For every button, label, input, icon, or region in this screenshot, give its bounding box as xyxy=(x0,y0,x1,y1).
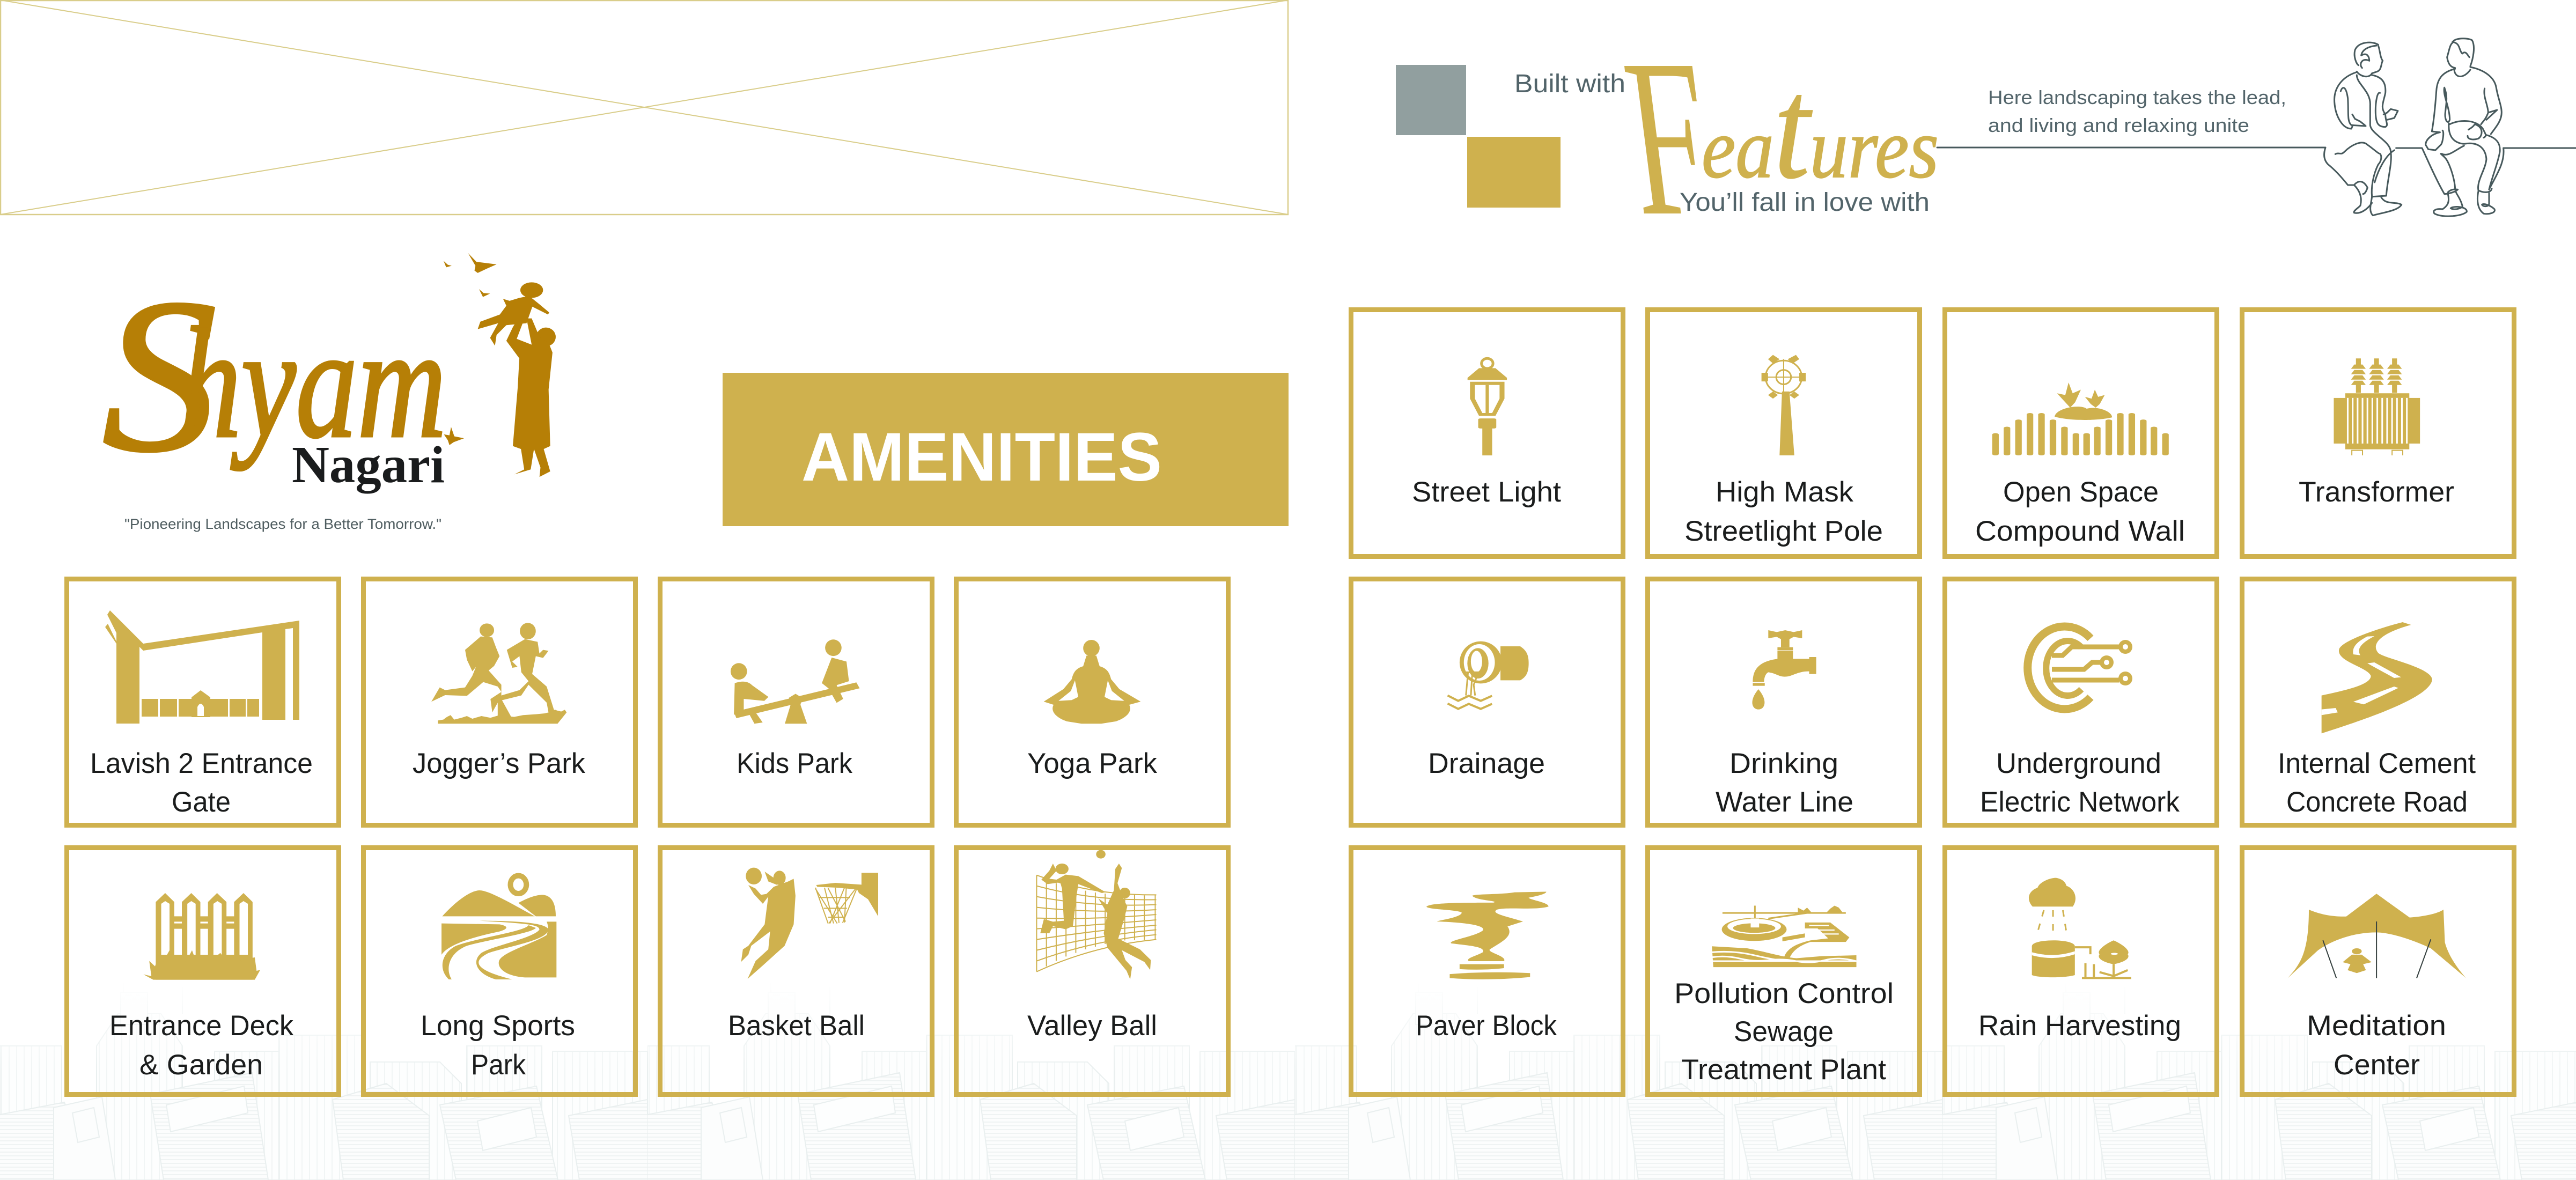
icon: rounded wall with plants xyxy=(1992,382,2169,455)
script heading: Features xyxy=(1596,13,1939,263)
label: High Mask xyxy=(1716,476,1854,508)
label: Street Light xyxy=(1412,476,1561,508)
label: Electric Network xyxy=(1980,786,2180,818)
card: Kids Park xyxy=(660,579,932,825)
label: Lavish 2 Entrance xyxy=(90,748,313,779)
label: Transformer xyxy=(2299,476,2454,508)
logo script wordmark xyxy=(102,254,446,497)
label xyxy=(1684,476,1883,547)
card: Valley Ball xyxy=(956,847,1228,1094)
intro text xyxy=(1988,86,2286,136)
label: Pollution Control xyxy=(1674,978,1894,1009)
card: Entrance Deck & Garden xyxy=(67,847,339,1094)
card: Long Sports Park xyxy=(364,847,635,1094)
card: Transformer xyxy=(2242,310,2514,557)
subheading: You'll fall in love with: You’ll fall in love with xyxy=(1680,188,1930,217)
card: Pollution Control Sewage Treatment Plant xyxy=(1648,847,1919,1094)
label: Rain Harvesting xyxy=(1978,1010,2181,1042)
label: Entrance Deck xyxy=(109,1010,293,1042)
label: Valley Ball xyxy=(1027,1010,1157,1042)
label: Paver Block xyxy=(1416,1010,1557,1042)
label: Yoga Park xyxy=(1027,748,1157,779)
icon: circuit network xyxy=(2028,626,2132,709)
card: Lavish 2 Entrance Gate xyxy=(67,579,339,825)
heading: Built with: Built with xyxy=(1514,70,1625,98)
label: Drinking xyxy=(1729,748,1838,779)
label xyxy=(1975,476,2185,547)
intro text: Here landscaping takes the lead, xyxy=(1988,86,2286,108)
label: Gate xyxy=(172,786,231,818)
icon: basketball player and hoop xyxy=(741,868,878,979)
logo script wordmark: S xyxy=(102,254,217,497)
icon: winding road xyxy=(2322,622,2432,733)
script heading: Features: eatures xyxy=(1702,48,1939,209)
label: Open Space xyxy=(2003,476,2159,508)
card: Yoga Park xyxy=(956,579,1228,825)
gold square xyxy=(1467,137,1561,208)
label xyxy=(90,748,313,818)
icon: meditating yoga figure xyxy=(1044,640,1140,724)
label: Internal Cement xyxy=(2278,748,2476,779)
card: High Mask Streetlight Pole xyxy=(1648,310,1919,557)
icon: children on seesaw xyxy=(731,639,859,724)
label xyxy=(1980,748,2180,818)
icon: sewage treatment plant xyxy=(1712,905,1857,967)
label: Long Sports xyxy=(421,1010,575,1042)
banner heading: AMENITIES xyxy=(801,419,1162,496)
label xyxy=(421,1010,575,1081)
label: Center xyxy=(2334,1049,2420,1081)
card: Basket Ball xyxy=(660,847,932,1094)
label: Kids Park xyxy=(737,748,852,779)
label: & Garden xyxy=(139,1049,263,1081)
card: Internal Cement Concrete Road xyxy=(2242,579,2514,825)
card: Rain Harvesting xyxy=(1945,847,2217,1094)
icon: tent with meditating figure xyxy=(2288,894,2466,978)
label: Water Line xyxy=(1716,786,1853,818)
icon: two joggers on grass xyxy=(431,623,566,724)
logo word Nagari: Nagari xyxy=(292,436,445,493)
panel: Features header xyxy=(1396,13,2576,263)
label xyxy=(2278,748,2476,818)
card: Drinking Water Line xyxy=(1648,579,1919,825)
card: Open Space Compound Wall xyxy=(1945,310,2217,557)
label: Sewage xyxy=(1734,1016,1834,1048)
label: Underground xyxy=(1996,748,2161,779)
label: Compound Wall xyxy=(1975,515,2185,547)
icon: high mast light xyxy=(1762,355,1806,455)
label xyxy=(2307,1010,2446,1081)
city skyline background xyxy=(0,982,2576,1180)
icon: picket fence with grass xyxy=(143,893,260,980)
card: Drainage xyxy=(1351,579,1623,825)
label: Jogger’s Park xyxy=(413,748,585,779)
icon: electrical transformer xyxy=(2334,358,2420,455)
label: Treatment Plant xyxy=(1681,1054,1886,1086)
icon: water tap with drop xyxy=(1752,630,1816,710)
banner: AMENITIES xyxy=(723,373,1289,526)
icon: drainage pipe xyxy=(1448,641,1529,709)
card: Street Light xyxy=(1351,310,1623,557)
grey square xyxy=(1396,65,1466,135)
card: Paver Block xyxy=(1351,847,1623,1094)
label: Park xyxy=(471,1049,526,1081)
label xyxy=(109,1010,293,1081)
tagline: "Pioneering Landscapes for a Better Tomorrow." xyxy=(124,516,441,532)
logo script wordmark: hyam xyxy=(180,295,446,471)
logo: Shyam Nagari xyxy=(102,253,556,532)
image placeholder with crossed lines xyxy=(0,0,1289,215)
label: Basket Ball xyxy=(728,1010,865,1042)
icon: street lamp xyxy=(1468,358,1507,455)
label: Meditation xyxy=(2307,1010,2446,1042)
label: Concrete Road xyxy=(2286,786,2468,818)
label xyxy=(1716,748,1853,818)
card: Meditation Center xyxy=(2242,847,2514,1094)
card: Jogger's Park xyxy=(364,579,635,825)
icon: parent lifting child with birds and butterfly xyxy=(444,253,556,477)
label xyxy=(1674,978,1894,1086)
card: Underground Electric Network xyxy=(1945,579,2217,825)
line drawing: two people sitting on a line xyxy=(1937,39,2576,216)
label: Streetlight Pole xyxy=(1684,515,1883,547)
icon: volleyball players at net xyxy=(1036,850,1157,979)
icon: entrance gate xyxy=(105,610,299,724)
script heading: Features: F xyxy=(1596,13,1739,263)
intro text: and living and relaxing unite xyxy=(1988,114,2249,136)
icon: mountains, sun and winding road xyxy=(441,876,556,979)
label: Drainage xyxy=(1428,748,1545,779)
icon: rain harvesting tank and flower xyxy=(2029,878,2131,979)
icon: paver path xyxy=(1426,892,1549,979)
